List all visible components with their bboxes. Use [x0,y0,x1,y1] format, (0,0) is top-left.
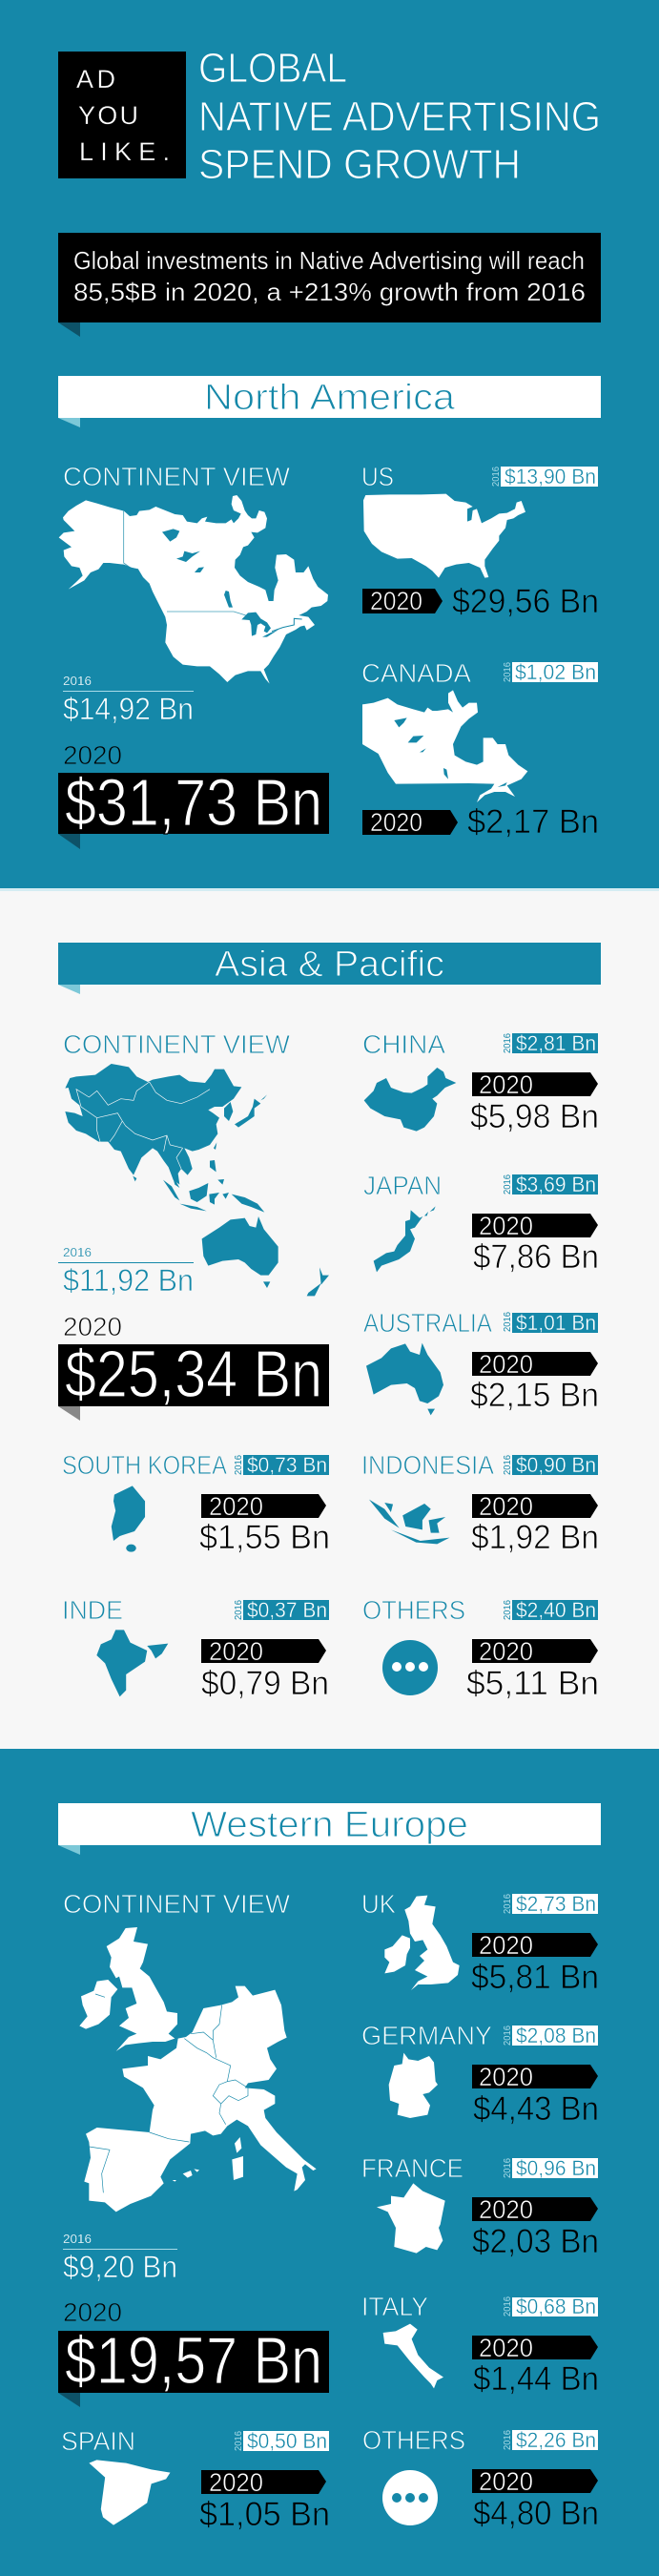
country: India: 2016 [234,1600,244,1620]
heading: Asia & Pacific [58,943,601,994]
country: US: $29,56 Bn [452,583,599,620]
country: France [361,2153,599,2260]
country: Germany: 2020 [479,2063,533,2091]
country: Germany: $2,08 Bn [516,2024,596,2047]
country: France: $2,03 Bn [472,2223,599,2260]
2016 value: 2016 [63,674,92,688]
country: South Korea: $0,73 Bn [247,1453,327,1477]
callout: global investment: 85,5$B in 2020, a +213% growth from 2016 [73,278,586,306]
country: US [361,462,599,620]
country: Indonesia: $1,92 Bn [471,1519,599,1556]
country: France: 2020 [479,2195,533,2224]
others: Asia: $2,40 Bn [516,1598,596,1622]
2016 value: $14,92 Bn [63,692,194,726]
heading: North America [58,376,601,427]
2020 value [58,1312,329,1421]
country: UK [361,1889,599,1996]
country: India [62,1595,329,1702]
country: Australia: 2020 [479,1350,533,1379]
2020 value: $25,34 Bn [65,1337,322,1411]
country: UK: 2016 [503,1894,513,1914]
map: Asia Pacific [65,1064,329,1296]
heading: Western Europe [58,1803,601,1855]
country: Italy: 2020 [479,2334,533,2362]
others: Europe: $4,80 Bn [473,2495,599,2532]
country: US: $13,90 Bn [505,465,596,488]
country: Italy: ITALY [361,2292,428,2321]
2016 value [58,1245,194,1298]
country: Japan: $7,86 Bn [473,1238,599,1276]
country: South Korea: 2020 [209,1492,263,1521]
title: NATIVE ADVERTISING [198,93,601,140]
country: Spain: SPAIN [61,2426,135,2456]
2020 value: 2020 [63,740,122,770]
country: Spain: 2020 [209,2468,263,2497]
callout: global investment [58,233,601,337]
country: Spain: $0,50 Bn [247,2429,327,2453]
country: China: CHINA [362,1029,445,1059]
country: Japan: JAPAN [363,1171,442,1200]
country: UK: UK [361,1889,396,1919]
2016 value: 2016 [63,1245,92,1259]
country: Spain: $1,05 Bn [199,2496,330,2533]
logo: LIKE. [79,137,170,166]
others: Europe: OTHERS [362,2425,465,2455]
logo [58,52,186,178]
continent view label: CONTINENT VIEW [63,1029,291,1059]
panel: North America section [0,0,659,888]
country: China: 2020 [479,1070,533,1099]
country: Indonesia: INDONESIA [361,1450,494,1480]
country: Italy [361,2292,599,2398]
country: China [362,1029,599,1135]
country: Canada: $2,17 Bn [467,803,599,841]
country: Canada: CANADA [361,658,471,688]
logo: AD [76,65,115,93]
country: India: INDE [62,1595,123,1625]
country: Canada: 2020 [370,808,422,837]
others: Asia: OTHERS [362,1595,465,1625]
heading: Asia & Pacific: Asia & Pacific [215,945,444,985]
country: Spain [61,2426,330,2533]
country: Italy: $0,68 Bn [516,2295,596,2318]
logo: YOU [78,101,138,130]
country: Indonesia [361,1450,599,1556]
others: Europe: 2020 [479,2467,533,2496]
country: Italy: $1,44 Bn [473,2360,599,2398]
country: Australia [363,1308,599,1415]
country: Canada [361,658,599,841]
country: Japan: 2020 [479,1212,533,1240]
country: US: 2020 [370,587,422,615]
country: UK: $5,81 Bn [471,1959,599,1996]
country: France: 2016 [503,2158,513,2178]
country: South Korea: SOUTH KOREA [62,1450,227,1480]
2020 value [58,740,329,849]
country: Japan [363,1171,599,1276]
heading: North America: North America [204,378,456,418]
country: UK: 2020 [479,1931,533,1960]
others: Asia: 2020 [479,1637,533,1666]
country: South Korea [62,1450,330,1556]
country: Germany: 2016 [503,2025,513,2046]
country: Australia: $2,15 Bn [470,1377,599,1414]
panel: Western Europe section [0,1749,659,2576]
country: Australia: AUSTRALIA [363,1308,492,1338]
country: France: FRANCE [361,2153,463,2183]
country: China: 2016 [503,1033,513,1053]
2016 value: $9,20 Bn [63,2250,177,2284]
country: South Korea: $1,55 Bn [199,1519,330,1556]
2016 value: $11,92 Bn [63,1263,194,1298]
heading: Western Europe: Western Europe [191,1805,468,1845]
2016 value [63,674,194,726]
others: Asia [362,1595,599,1702]
country: China: $2,81 Bn [516,1031,596,1055]
2020 value: $31,73 Bn [65,765,322,840]
country: Japan: 2016 [503,1174,513,1195]
others: Europe: $2,26 Bn [516,2428,596,2452]
country: Germany: $4,43 Bn [473,2090,599,2128]
country: Germany: GERMANY [361,2021,492,2050]
continent view label: CONTINENT VIEW [63,462,291,491]
country: Japan: $3,69 Bn [516,1173,596,1196]
2016 value [63,2232,177,2284]
2020 value: 2020 [63,2297,122,2327]
2020 value: $19,57 Bn [65,2323,322,2398]
title [198,45,601,188]
country: US: 2016 [491,467,502,487]
2020 value [58,2297,329,2407]
others: Asia: 2016 [503,1600,513,1620]
country: France: $0,96 Bn [516,2156,596,2180]
callout: global investment: Global investments in Native Advertising will reach [73,246,585,275]
continent view label: CONTINENT VIEW [63,1889,291,1919]
country: Italy: 2016 [503,2296,513,2316]
country: China: $5,98 Bn [470,1098,599,1135]
country: Indonesia: 2016 [503,1455,513,1475]
others: Asia: $5,11 Bn [466,1665,599,1702]
country: Australia: 2016 [503,1312,513,1332]
country: Indonesia: 2020 [479,1492,533,1521]
map: North America [59,495,328,684]
country: South Korea: 2016 [234,1455,244,1475]
map: Western Europe [79,1927,317,2212]
country: India: 2020 [209,1637,263,1666]
country: India: $0,79 Bn [201,1665,329,1702]
others: Europe: 2016 [503,2430,513,2450]
country: Germany [361,2021,599,2128]
country: Indonesia: $0,90 Bn [516,1453,596,1477]
country: Australia: $1,01 Bn [516,1311,596,1335]
country: India: $0,37 Bn [247,1598,327,1622]
others: Europe [362,2425,599,2532]
title: GLOBAL [198,45,347,92]
country: Canada: $1,02 Bn [515,660,596,684]
country: Canada: 2016 [503,662,513,682]
title: SPEND GROWTH [198,141,521,188]
2020 value: 2020 [63,1312,122,1341]
2016 value: 2016 [63,2232,92,2246]
panel: Asia & Pacific section [0,888,659,1749]
country: UK: $2,73 Bn [516,1892,596,1916]
country: Spain: 2016 [234,2431,244,2451]
country: US: US [361,462,394,491]
